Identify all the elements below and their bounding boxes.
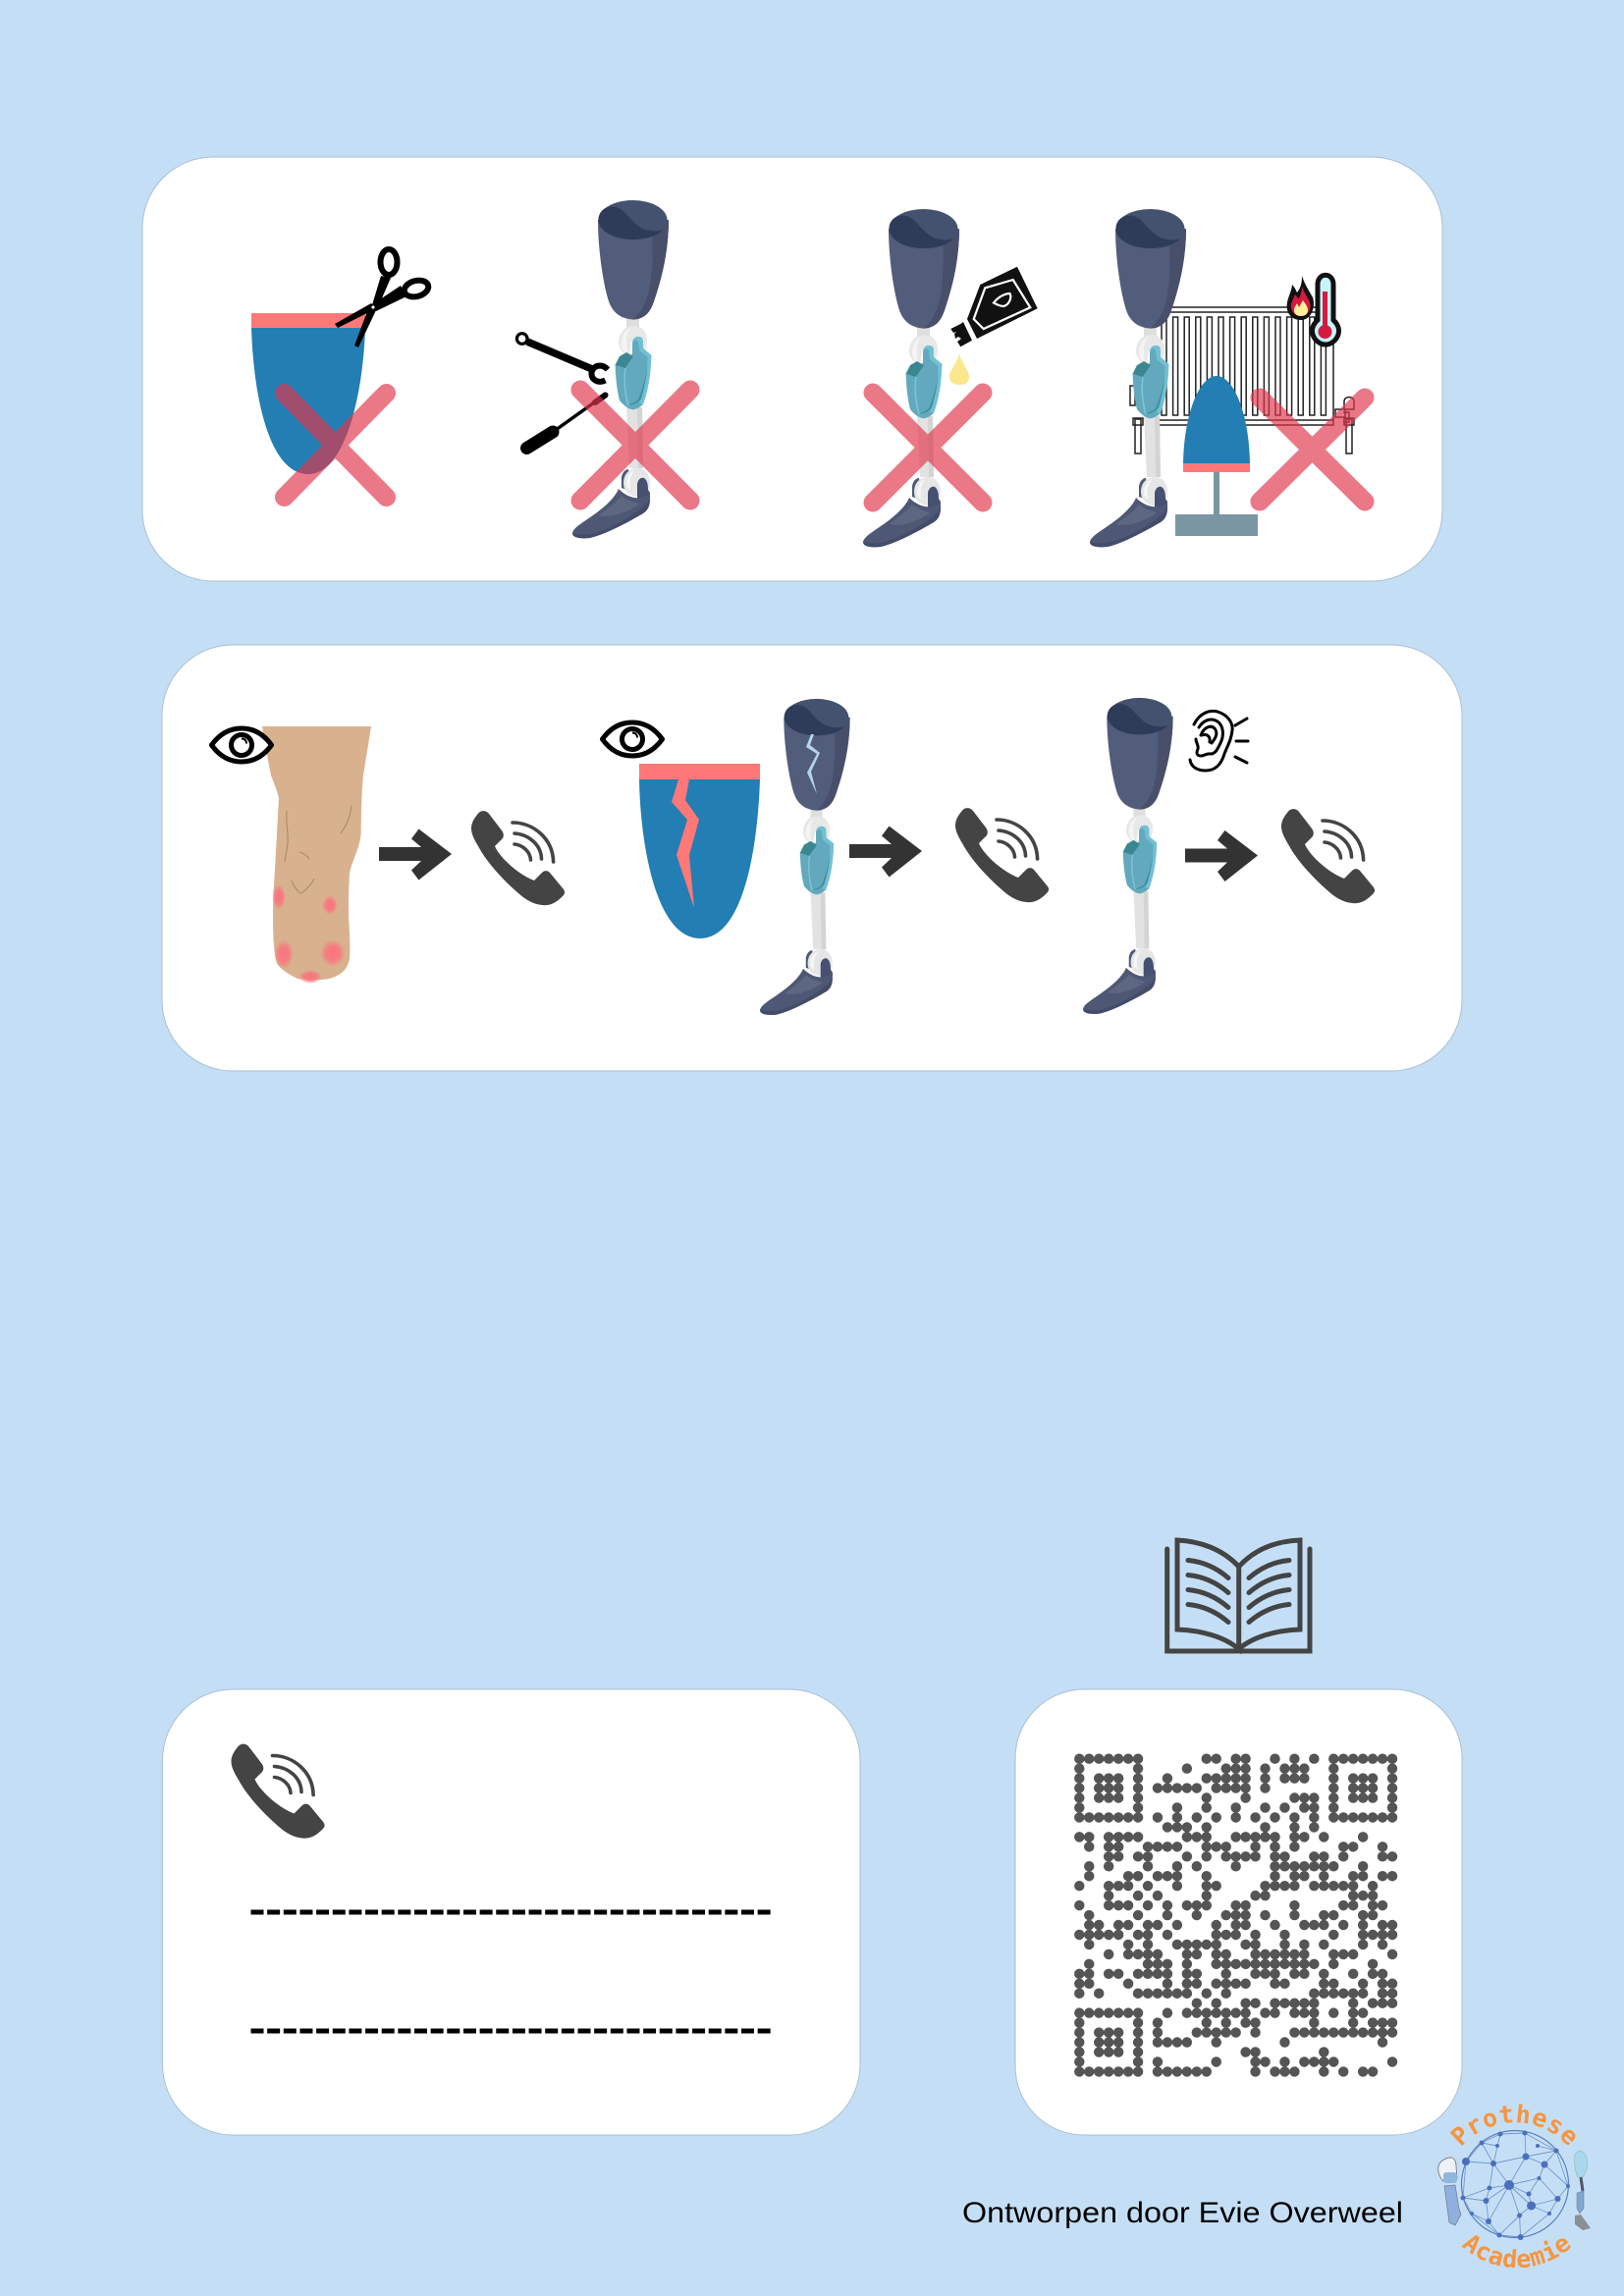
icon: cracked leg	[760, 699, 850, 1015]
icon: prosthetic leg near radiator	[1090, 209, 1186, 547]
logo: Prothese Academie: Prothese	[1449, 2104, 1575, 2146]
panel: phone numbers	[163, 1689, 860, 2135]
icon: phone	[471, 811, 565, 905]
logo: Prothese Academie: Academie	[1461, 2234, 1571, 2268]
panel: QR code	[1015, 1689, 1462, 2135]
arrow	[1185, 830, 1258, 881]
panel background phone	[163, 1689, 860, 2135]
icon: wrench	[516, 334, 608, 382]
icon: phone	[231, 1744, 325, 1839]
icon: X over radiator	[1260, 398, 1365, 502]
icon: liner with scissors	[251, 249, 430, 474]
icon: liner on stand	[1175, 376, 1258, 536]
icon: bottle	[950, 267, 1038, 347]
icon: X over liner	[285, 393, 387, 497]
icon: eye	[603, 722, 662, 756]
icon: oil drop	[949, 354, 969, 385]
panel: check and call	[162, 645, 1462, 1071]
icon: screwdriver	[526, 395, 605, 448]
logo prosthetic arm	[1438, 2158, 1461, 2225]
logo prosthetic leg	[1575, 2151, 1591, 2230]
write-in line 2	[251, 2028, 773, 2034]
panel: do not modify or heat	[142, 157, 1442, 581]
logo text top	[1459, 2122, 1571, 2150]
credit text: Ontworpen door Evie Overweel	[962, 2197, 1403, 2229]
icon: phone	[1281, 809, 1375, 903]
panel background QR	[1015, 1689, 1462, 2135]
icon: ear with sound lines	[1190, 711, 1248, 771]
write-in line 1	[251, 1910, 773, 1914]
arrow	[849, 827, 922, 878]
QR code	[1079, 1759, 1392, 2071]
icon: leg making sound	[1083, 698, 1173, 1014]
icon: radiator	[1130, 307, 1354, 454]
icon: flame and thermometer	[1287, 275, 1338, 345]
icon: prosthetic leg with oil bottle	[863, 209, 1038, 547]
icon: book	[1167, 1540, 1310, 1651]
icon: torn liner	[639, 764, 760, 938]
logo: Prothese Academie	[1437, 2104, 1591, 2268]
arrow	[379, 828, 452, 880]
panel background middle	[162, 645, 1462, 1071]
panel background top	[142, 157, 1442, 581]
logo network globe	[1461, 2130, 1570, 2240]
icon: prosthetic leg with tools	[516, 200, 669, 538]
icon: X over leg 1	[580, 390, 690, 501]
icon: eye	[212, 728, 271, 762]
icon: residual limb with red spots	[262, 726, 371, 984]
logo text bottom	[1454, 2238, 1580, 2268]
icon: phone	[955, 808, 1049, 902]
icon: X over leg 2	[873, 393, 983, 503]
